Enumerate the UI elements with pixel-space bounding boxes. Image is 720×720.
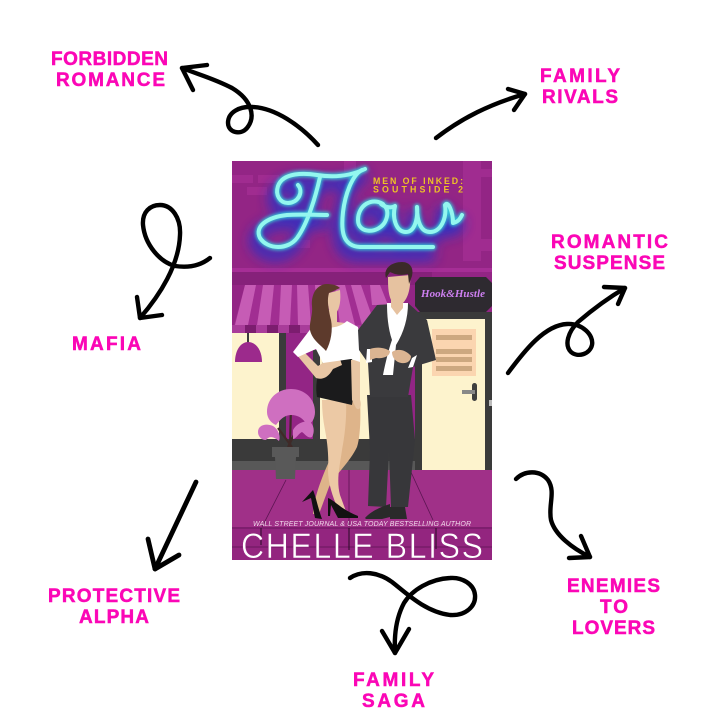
arrow: enemies to lovers	[516, 472, 590, 558]
face	[328, 290, 340, 313]
neon title: Flow	[256, 169, 462, 255]
potted plant	[258, 389, 315, 479]
trousers	[367, 395, 415, 507]
cover author name: CHELLE BLISS	[241, 526, 483, 566]
arrow: forbidden romance	[182, 65, 318, 145]
series title	[373, 178, 463, 192]
arrow: romantic suspense	[508, 287, 625, 373]
label: enemies to lovers: ENEMIES	[567, 576, 660, 597]
man figure	[358, 262, 436, 519]
label: family rivals: RIVALS	[542, 87, 618, 108]
arm on hip	[296, 352, 342, 379]
label: protective alpha	[48, 586, 180, 628]
label: romantic suspense: ROMANTIC	[551, 232, 668, 253]
label: family saga: FAMILY	[353, 670, 434, 691]
neck and face	[388, 275, 410, 315]
door handle	[472, 383, 477, 401]
neon glow	[259, 169, 462, 247]
skirt	[316, 358, 354, 405]
label: protective alpha: PROTECTIVE	[48, 586, 180, 607]
hair	[385, 262, 413, 284]
shoes	[365, 504, 407, 519]
hanging lamp	[235, 333, 262, 362]
label: family saga	[353, 670, 434, 712]
hands and cuffs	[366, 349, 417, 368]
cover wall background	[232, 161, 492, 439]
label: romantic suspense: SUSPENSE	[554, 253, 665, 274]
label: enemies to lovers	[567, 576, 660, 639]
wall lower band	[232, 272, 432, 285]
arrow: family rivals	[436, 89, 525, 138]
shirt	[383, 303, 408, 375]
door window panel	[432, 329, 476, 376]
neck	[328, 310, 344, 328]
arrow: family saga	[350, 573, 475, 653]
label: enemies to lovers: TO	[600, 597, 628, 618]
label: family rivals	[540, 66, 620, 108]
hanging sign	[415, 277, 492, 312]
left window	[232, 333, 279, 439]
pavement	[232, 470, 492, 550]
jacket	[358, 303, 436, 397]
label: enemies to lovers: LOVERS	[572, 618, 655, 639]
white top	[293, 321, 360, 363]
neon tube	[259, 169, 462, 247]
right arm	[351, 360, 361, 409]
label: romantic suspense	[551, 232, 668, 274]
window column	[279, 333, 286, 439]
back leg	[313, 400, 360, 514]
arrow: protective alpha	[148, 482, 196, 569]
series title: MEN OF INKED:	[373, 176, 463, 186]
middle window	[320, 351, 370, 439]
front leg	[322, 400, 347, 514]
wall bricks	[232, 161, 492, 272]
label: protective alpha: ALPHA	[79, 607, 149, 628]
label: forbidden romance	[51, 49, 168, 91]
shoes	[302, 490, 358, 519]
hanging sign: Hook&Hustle	[420, 288, 485, 300]
label: forbidden romance: FORBIDDEN	[51, 49, 168, 70]
door with frame	[415, 312, 492, 470]
book cover	[232, 161, 492, 566]
arrow: mafia	[137, 205, 210, 318]
label: mafia: MAFIA	[72, 334, 141, 355]
awning	[232, 285, 390, 333]
infographic canvas	[49, 51, 668, 708]
cover tagline: WALL STREET JOURNAL & USA TODAY BESTSELLING AUTHOR	[253, 521, 471, 528]
hair	[310, 284, 340, 351]
woman figure	[293, 284, 361, 519]
label: family rivals: FAMILY	[540, 66, 620, 87]
lower dark wall strip	[232, 439, 422, 461]
neon shadow	[256, 177, 459, 255]
label: forbidden romance: ROMANCE	[56, 70, 165, 91]
label: family saga: SAGA	[362, 691, 425, 712]
series title: SOUTHSIDE 2	[373, 184, 463, 194]
